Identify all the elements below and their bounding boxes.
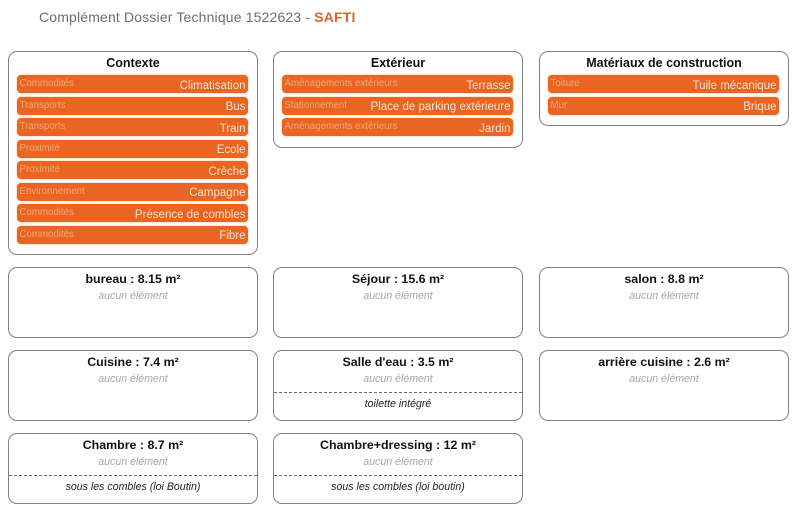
item: Terrasse: Aménagements extérieurs xyxy=(284,78,398,89)
item: Climatisation xyxy=(16,75,248,93)
item: Présence de combles: Présence de combles xyxy=(135,208,246,220)
item: Brique: Brique xyxy=(743,101,776,113)
item: Campagne: Environnement xyxy=(20,186,85,196)
panel: Cuisine xyxy=(8,350,258,421)
detail: sous les combles: sous les combles (loi Boutin) xyxy=(66,481,200,493)
item: Ecole: Ecole xyxy=(217,144,246,156)
panel: bureau xyxy=(8,267,258,338)
heading: Séjour: Séjour : 15.6 m² xyxy=(352,272,444,286)
title: Complément Dossier Technique 1522623 - SAFTI xyxy=(39,9,356,25)
item: Terrasse xyxy=(282,75,512,93)
item: Jardin xyxy=(282,118,512,136)
panel: Séjour xyxy=(273,267,523,338)
item: Bus: Bus xyxy=(226,101,246,113)
heading: Chambre+dressing: Chambre+dressing : 12 m² xyxy=(320,438,476,452)
heading: salon: salon : 8.8 m² xyxy=(624,272,704,286)
detail: toilette intégré: toilette intégré xyxy=(365,398,431,410)
panel: Contexte xyxy=(8,51,258,255)
item: Brique: Mur xyxy=(550,100,567,110)
item: Climatisation: Commodités xyxy=(20,78,74,89)
item: Fibre: Commodités xyxy=(20,228,74,240)
item: Tuile mécanique: Toiture xyxy=(550,78,580,89)
item: Ecole xyxy=(16,140,248,158)
note: aucun élément: aucun élément xyxy=(98,373,168,385)
item: Brique xyxy=(548,96,778,114)
note: aucun élément: aucun élément xyxy=(98,456,168,468)
note: aucun élément: aucun élément xyxy=(363,290,433,302)
item: Train xyxy=(16,118,248,136)
panel: arrière cuisine xyxy=(539,350,789,421)
heading: Matériaux de construction: Matériaux de construction xyxy=(586,56,742,70)
item: Fibre: Fibre xyxy=(219,230,246,242)
note: aucun élément: aucun élément xyxy=(363,373,433,385)
item: Crèche xyxy=(16,161,248,179)
item: Bus xyxy=(16,96,248,114)
panel: Salle d'eau xyxy=(273,350,523,421)
item: Fibre xyxy=(16,226,248,244)
item: Place de parking extérieure xyxy=(282,96,512,114)
heading: Cuisine: Cuisine : 7.4 m² xyxy=(87,355,179,369)
panel: Extérieur xyxy=(273,51,523,148)
heading: Extérieur: Extérieur xyxy=(371,56,425,70)
item: Climatisation: Climatisation xyxy=(180,80,246,92)
note: aucun élément: aucun élément xyxy=(363,456,433,468)
heading: arrière cuisine: arrière cuisine : 2.6 m² xyxy=(598,355,730,369)
item: Crèche: Proximité xyxy=(20,164,60,175)
item: Présence de combles: Commodités xyxy=(20,207,74,218)
item: Place de parking extérieure: Stationnement xyxy=(284,100,347,110)
item: Train: Transports xyxy=(20,121,65,132)
note: aucun élément: aucun élément xyxy=(629,290,699,302)
heading: Contexte: Contexte xyxy=(106,56,160,70)
item: Train: Train xyxy=(220,122,246,134)
panel: salon xyxy=(539,267,789,338)
heading: bureau: bureau : 8.15 m² xyxy=(85,272,181,286)
item: Campagne xyxy=(16,182,248,200)
panel: Chambre+dressing xyxy=(273,433,523,504)
item: Campagne: Campagne xyxy=(189,187,246,199)
heading: Chambre: Chambre : 8.7 m² xyxy=(83,438,183,452)
item: Jardin: Aménagements extérieurs xyxy=(284,121,398,132)
note: aucun élément: aucun élément xyxy=(98,290,168,302)
item: Place de parking extérieure: Place de parking extérieure xyxy=(370,101,510,113)
item: Terrasse: Terrasse xyxy=(466,80,510,92)
item: Présence de combles xyxy=(16,204,248,222)
item: Tuile mécanique: Tuile mécanique xyxy=(693,80,776,92)
heading: Salle d'eau: Salle d'eau : 3.5 m² xyxy=(342,355,454,369)
panel: Chambre xyxy=(8,433,258,504)
panel: Matériaux de construction xyxy=(539,51,789,126)
item: Jardin: Jardin xyxy=(479,122,510,134)
detail: sous les combles: sous les combles (loi boutin) xyxy=(331,481,465,493)
note: aucun élément: aucun élément xyxy=(629,373,699,385)
item: Ecole: Proximité xyxy=(20,142,60,154)
item: Bus: Transports xyxy=(20,100,65,110)
item: Tuile mécanique xyxy=(548,75,778,93)
item: Crèche: Crèche xyxy=(208,166,246,178)
